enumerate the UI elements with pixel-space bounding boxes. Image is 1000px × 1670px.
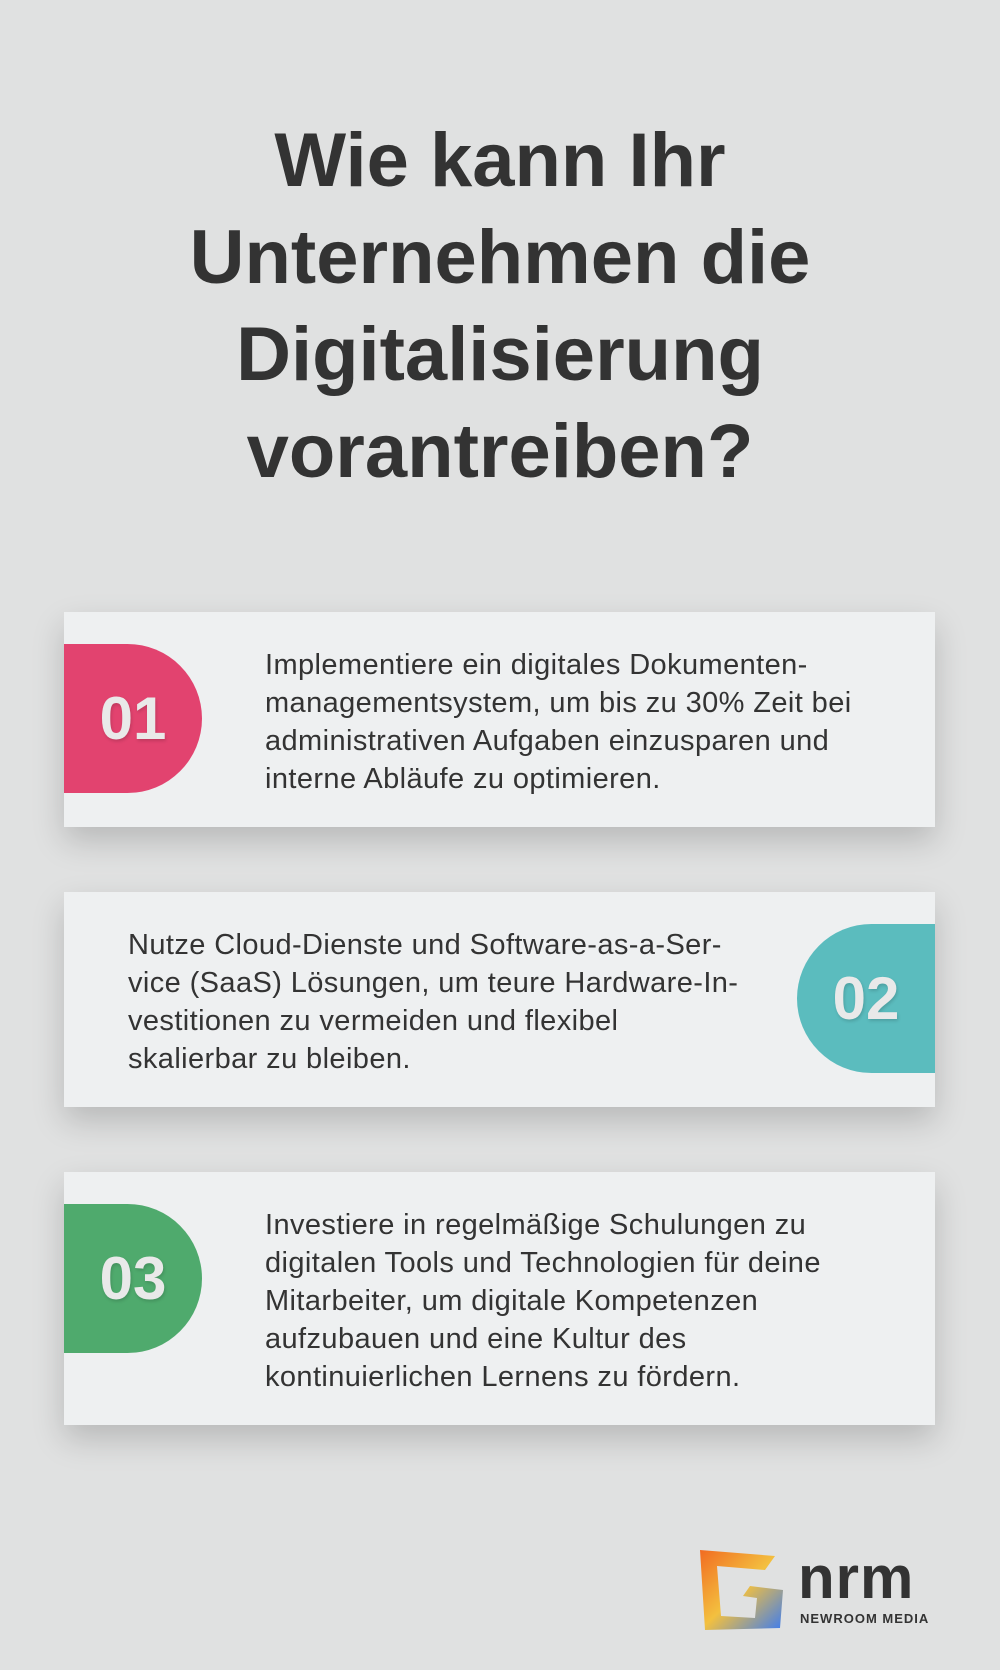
title xyxy=(190,118,810,494)
logo: NEWROOM MEDIA xyxy=(800,1611,929,1626)
panel: step 2 xyxy=(64,892,935,1107)
logo xyxy=(700,1544,929,1630)
text step 3: kontinuierlichen Lernens zu fördern. xyxy=(265,1361,740,1393)
badge 02 xyxy=(797,924,935,1073)
logo text: nrm xyxy=(798,1544,914,1611)
text step 3: aufzubauen und eine Kultur des xyxy=(265,1323,687,1355)
text step 2 xyxy=(128,929,738,1075)
text step 2: skalierbar zu bleiben. xyxy=(128,1043,411,1075)
panel: step 1 xyxy=(64,612,935,827)
text step 1: administrativen Aufgaben einzusparen und xyxy=(265,725,829,757)
text step 2: vice (SaaS) Lösungen, um teure Hardware-In- xyxy=(128,967,738,999)
title: vorantreiben? xyxy=(247,409,753,494)
badge 01: 01 xyxy=(100,685,166,752)
text step 2: vestitionen zu vermeiden und flexibel xyxy=(128,1005,618,1037)
icon: logo mark xyxy=(700,1550,783,1630)
text step 3: Mitarbeiter, um digitale Kompetenzen xyxy=(265,1285,758,1317)
title: Wie kann Ihr xyxy=(274,118,726,203)
title: Digitalisierung xyxy=(236,312,764,397)
text step 1 xyxy=(265,649,852,795)
text step 1: Implementiere ein digitales Dokumenten- xyxy=(265,649,808,681)
badge 03: 03 xyxy=(100,1245,166,1312)
title: Unternehmen die xyxy=(190,215,810,300)
text step 2: Nutze Cloud-Dienste und Software-as-a-Ser- xyxy=(128,929,722,961)
text step 3 xyxy=(265,1209,821,1393)
badge 01 xyxy=(64,644,202,793)
text step 1: managementsystem, um bis zu 30% Zeit bei xyxy=(265,687,852,719)
badge 02: 02 xyxy=(833,965,899,1032)
text step 3: digitalen Tools und Technologien für deine xyxy=(265,1247,821,1279)
panel: step 3 xyxy=(64,1172,935,1425)
badge 03 xyxy=(64,1204,202,1353)
text step 3: Investiere in regelmäßige Schulungen zu xyxy=(265,1209,806,1241)
text step 1: interne Abläufe zu optimieren. xyxy=(265,763,661,795)
